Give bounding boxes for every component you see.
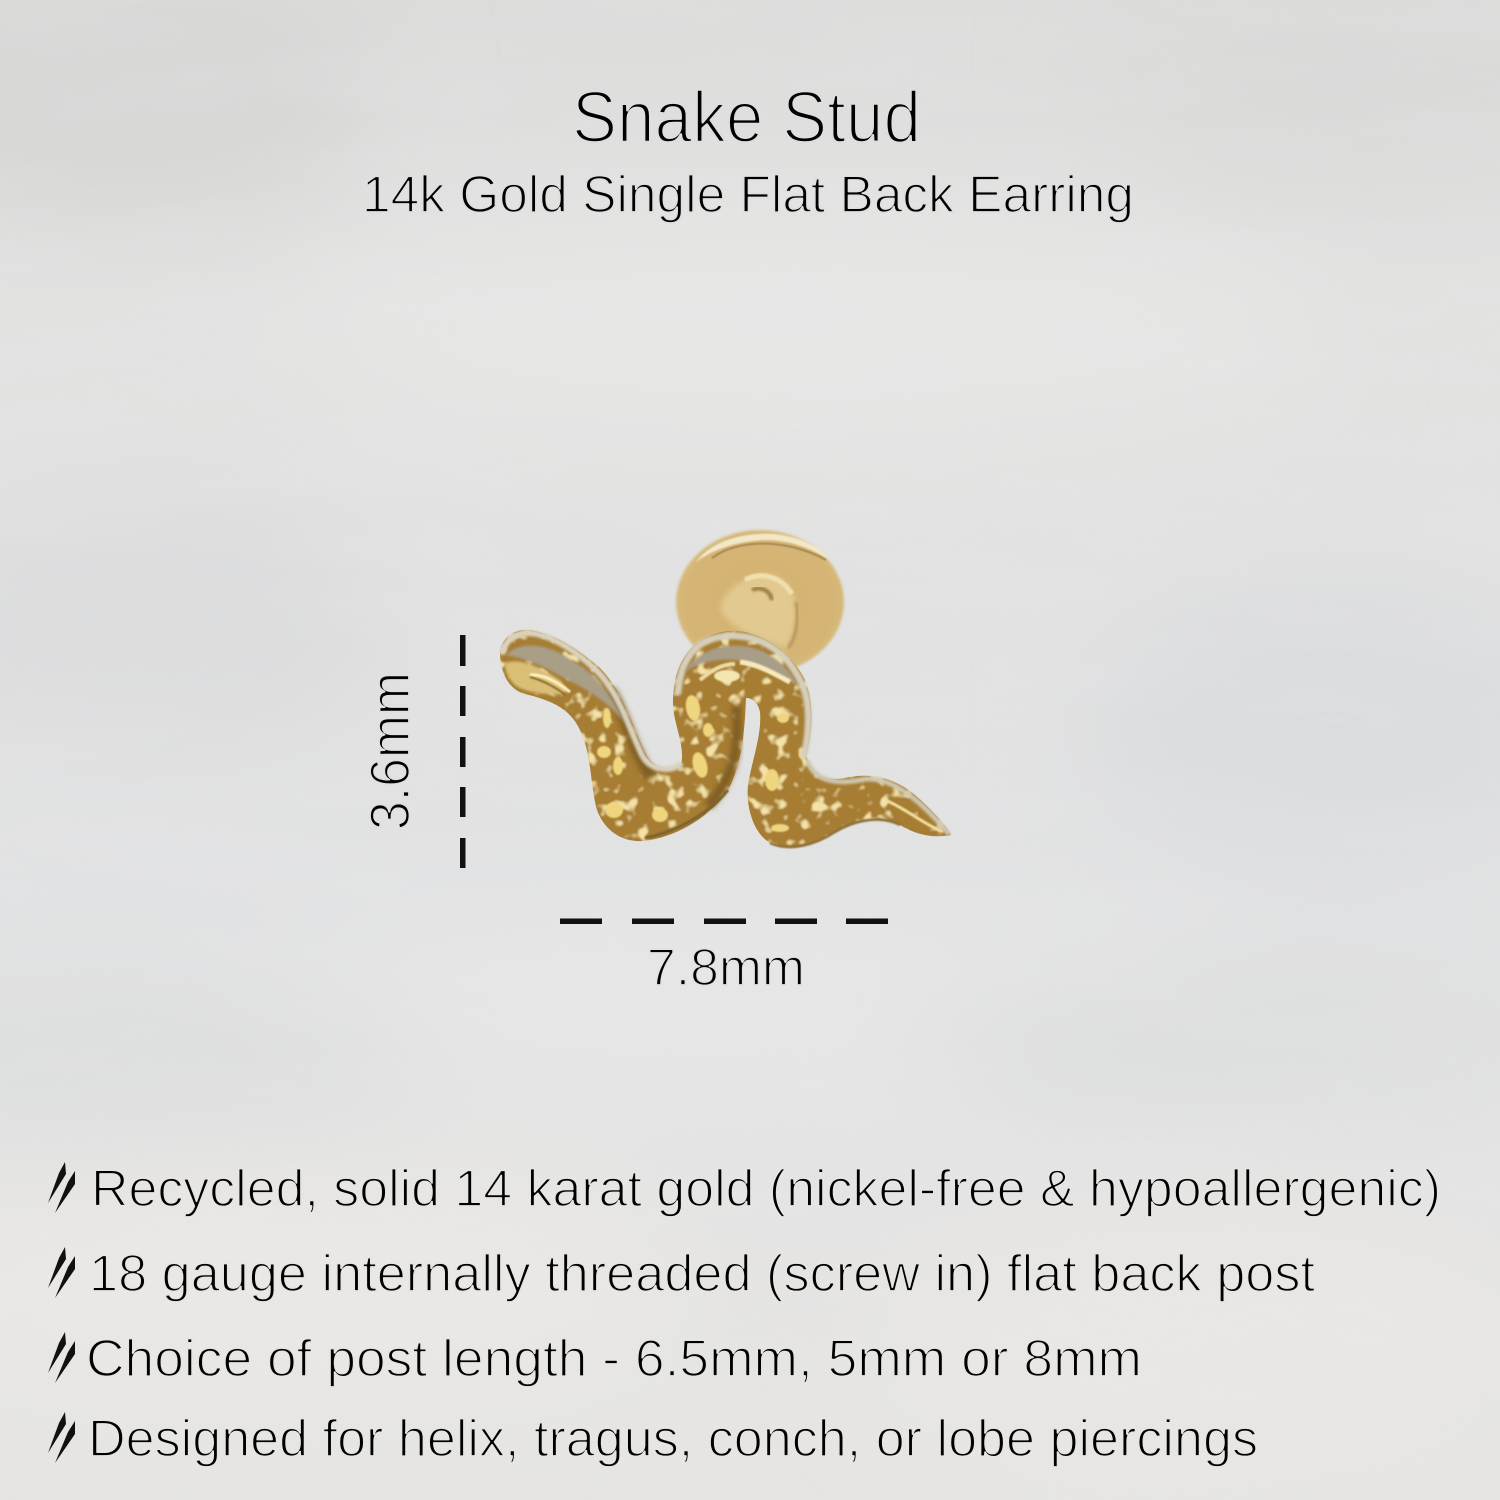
icon: double slash	[48, 1332, 75, 1383]
photo: snake stud earring	[500, 530, 951, 847]
bullet 1	[48, 1160, 1441, 1218]
bullet 4	[48, 1410, 1258, 1468]
bullet 3	[48, 1330, 1142, 1388]
taupe arch band	[684, 646, 799, 686]
feature list	[48, 1160, 1441, 1468]
flat back disc	[676, 530, 844, 674]
height dimension line	[460, 635, 466, 868]
width label: 7.8mm	[647, 939, 805, 997]
bullet 2	[48, 1245, 1316, 1303]
subtitle: 14k Gold Single Flat Back Earring	[362, 166, 1134, 224]
feature text 3: Choice of post length - 6.5mm, 5mm or 8mm	[86, 1330, 1142, 1388]
shaded channels	[610, 690, 652, 778]
icon: double slash	[48, 1412, 75, 1463]
height label: 3.6mm	[358, 672, 421, 830]
pale rim highlights	[503, 633, 948, 833]
feature text 4: Designed for helix, tragus, conch, or lobe piercings	[88, 1410, 1258, 1468]
taupe head band	[506, 645, 624, 722]
icon: double slash	[48, 1247, 75, 1298]
feature text 2: 18 gauge internally threaded (screw in) flat back post	[89, 1245, 1316, 1303]
snake body	[500, 630, 951, 847]
icon: double slash	[48, 1162, 75, 1213]
title: Snake Stud	[572, 78, 921, 158]
head highlight	[505, 661, 566, 694]
feature text 1: Recycled, solid 14 karat gold (nickel-free & hypoallergenic)	[91, 1160, 1441, 1218]
snake face details	[714, 670, 740, 682]
width dimension line	[560, 918, 888, 924]
scale flakes	[597, 694, 789, 832]
